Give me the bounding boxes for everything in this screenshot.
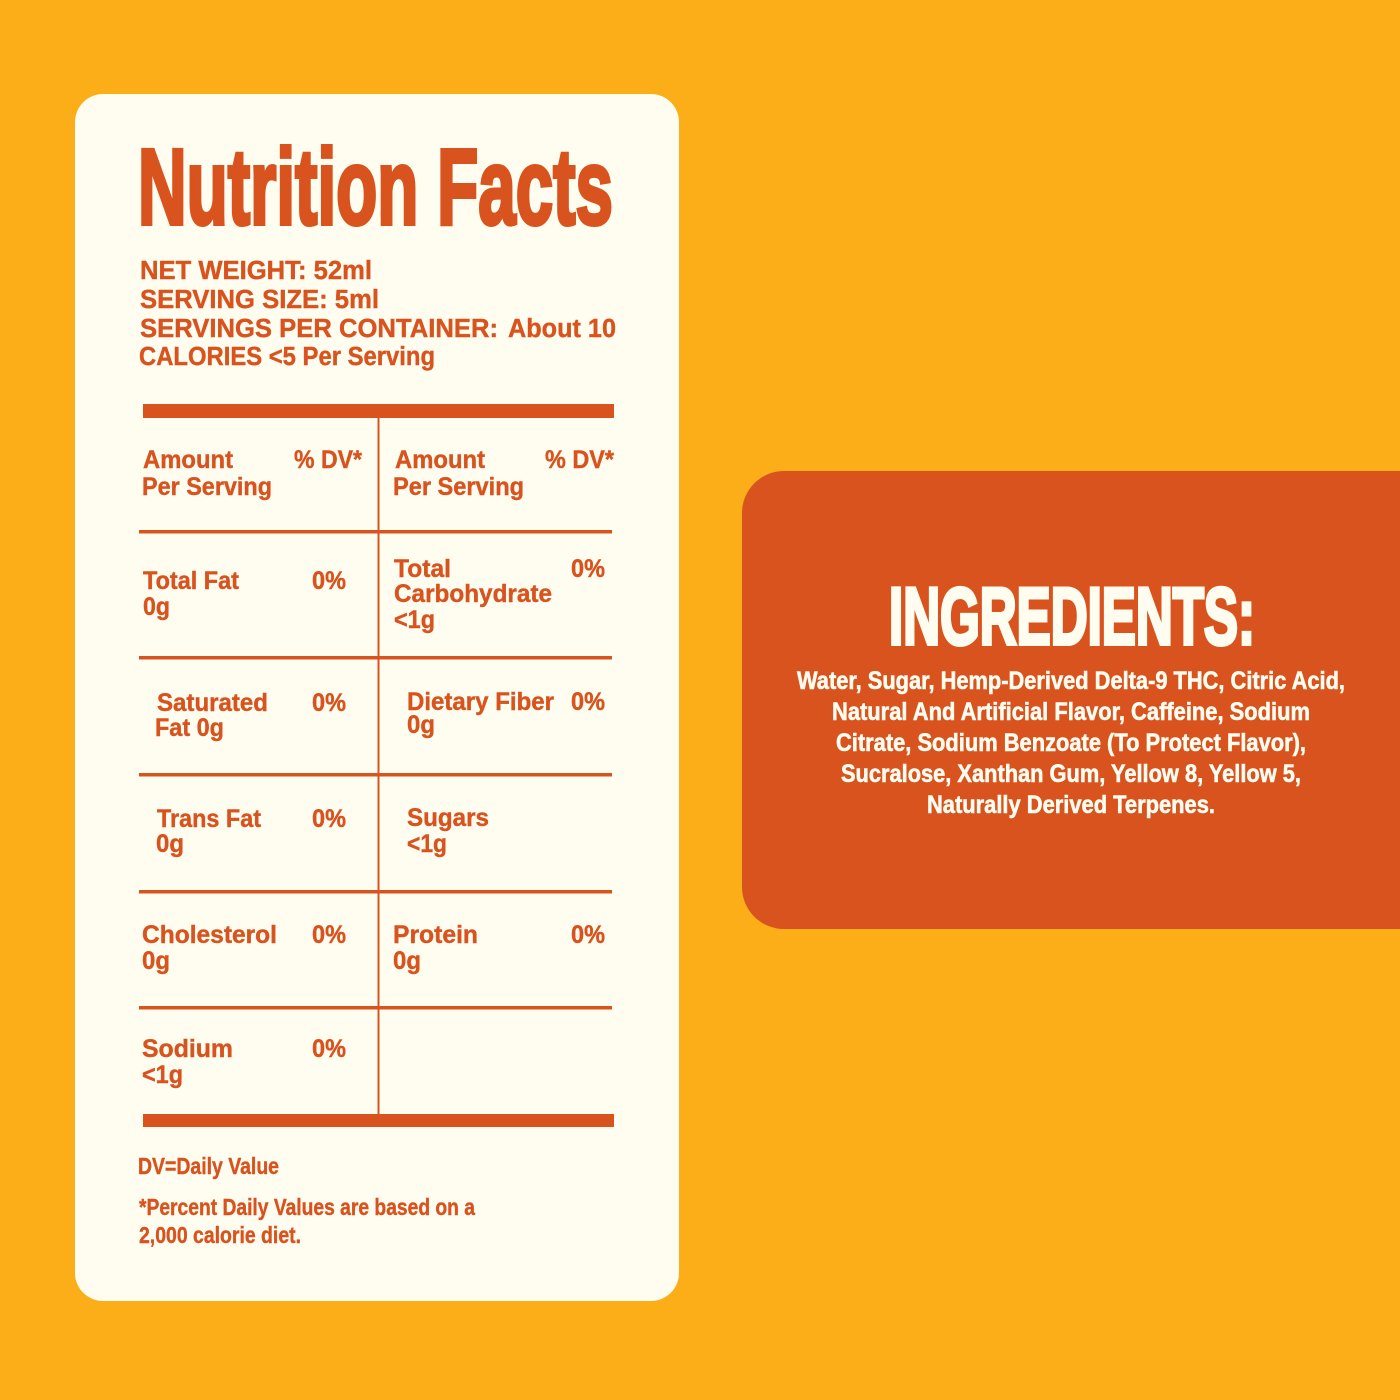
row: sugars: <1g bbox=[407, 830, 447, 858]
footnotes: 2,000 calorie diet. bbox=[139, 1222, 301, 1248]
panel: ingredients bbox=[742, 471, 1400, 929]
row: dietary fiber: 0g bbox=[407, 711, 435, 739]
footnotes bbox=[138, 1153, 475, 1248]
row: cholesterol bbox=[142, 921, 346, 975]
table header: right column: Per Serving bbox=[393, 473, 524, 501]
row: total carbohydrate: 0% bbox=[571, 555, 605, 583]
row: trans fat: 0g bbox=[156, 830, 184, 858]
row: protein: 0% bbox=[571, 921, 605, 949]
row: dietary fiber: 0% bbox=[571, 688, 605, 716]
nutrition table bbox=[139, 404, 614, 1127]
text block: ingredients list bbox=[797, 667, 1345, 819]
row: total fat bbox=[143, 567, 346, 621]
table header: right column: % DV* bbox=[545, 446, 614, 474]
table header: right column bbox=[393, 446, 614, 501]
row: sodium: <1g bbox=[142, 1061, 183, 1089]
row: sugars: Sugars bbox=[407, 804, 489, 832]
row: total fat: 0g bbox=[143, 593, 170, 621]
row: sugars bbox=[407, 804, 489, 858]
row: cholesterol: 0% bbox=[312, 921, 346, 949]
row: trans fat: 0% bbox=[312, 805, 346, 833]
row: saturated fat: Saturated bbox=[157, 689, 268, 717]
text block: ingredients list: Citrate, Sodium Benzoate (To Protect Flavor), bbox=[836, 729, 1306, 757]
row: trans fat: Trans Fat bbox=[157, 805, 262, 833]
row: protein: 0g bbox=[393, 947, 421, 975]
row: cholesterol: Cholesterol bbox=[142, 921, 277, 949]
row: total carbohydrate bbox=[394, 555, 605, 634]
row: total fat: 0% bbox=[312, 567, 346, 595]
text block: ingredients list: Sucralose, Xanthan Gum, Yellow 8, Yellow 5, bbox=[841, 760, 1301, 788]
text block: serving information: CALORIES <5 Per Serving bbox=[139, 343, 435, 371]
row: protein bbox=[393, 921, 605, 975]
row: sodium: Sodium bbox=[142, 1035, 233, 1063]
text block: ingredients list: Naturally Derived Terpenes. bbox=[927, 791, 1215, 819]
row: sodium: 0% bbox=[312, 1035, 346, 1063]
text block: serving information: SERVINGS PER CONTAINER: bbox=[140, 315, 498, 343]
table header: left column bbox=[142, 446, 362, 501]
table header: left column: Amount bbox=[143, 446, 234, 474]
text block: serving information: NET WEIGHT: 52ml bbox=[140, 257, 372, 285]
row: total fat: Total Fat bbox=[143, 567, 240, 595]
text block: ingredients list: Natural And Artificial Flavor, Caffeine, Sodium bbox=[832, 698, 1310, 726]
table header: left column: Per Serving bbox=[142, 473, 272, 501]
title: Nutrition Facts: Nutrition Facts bbox=[138, 126, 613, 247]
row: saturated fat: Fat 0g bbox=[155, 714, 224, 742]
row: dietary fiber bbox=[407, 688, 605, 739]
row: total carbohydrate: <1g bbox=[394, 606, 435, 634]
row: saturated fat: 0% bbox=[312, 689, 346, 717]
table header: left column: % DV* bbox=[294, 446, 362, 474]
row: total carbohydrate: Total bbox=[394, 555, 451, 583]
row: dietary fiber: Dietary Fiber bbox=[407, 688, 554, 716]
row: total carbohydrate: Carbohydrate bbox=[394, 580, 552, 608]
table header: right column: Amount bbox=[395, 446, 486, 474]
row: sodium bbox=[142, 1035, 346, 1089]
text block: serving information: About 10 bbox=[508, 315, 616, 343]
row: cholesterol: 0g bbox=[142, 947, 170, 975]
text block: serving information: SERVING SIZE: 5ml bbox=[140, 286, 379, 314]
row: trans fat bbox=[156, 805, 346, 858]
panel: nutrition facts bbox=[75, 94, 679, 1301]
row: saturated fat bbox=[155, 689, 346, 742]
text block: serving information bbox=[139, 257, 616, 371]
footnotes: DV=Daily Value bbox=[138, 1153, 279, 1179]
footnotes: *Percent Daily Values are based on a bbox=[139, 1194, 475, 1220]
row: protein: Protein bbox=[393, 921, 478, 949]
